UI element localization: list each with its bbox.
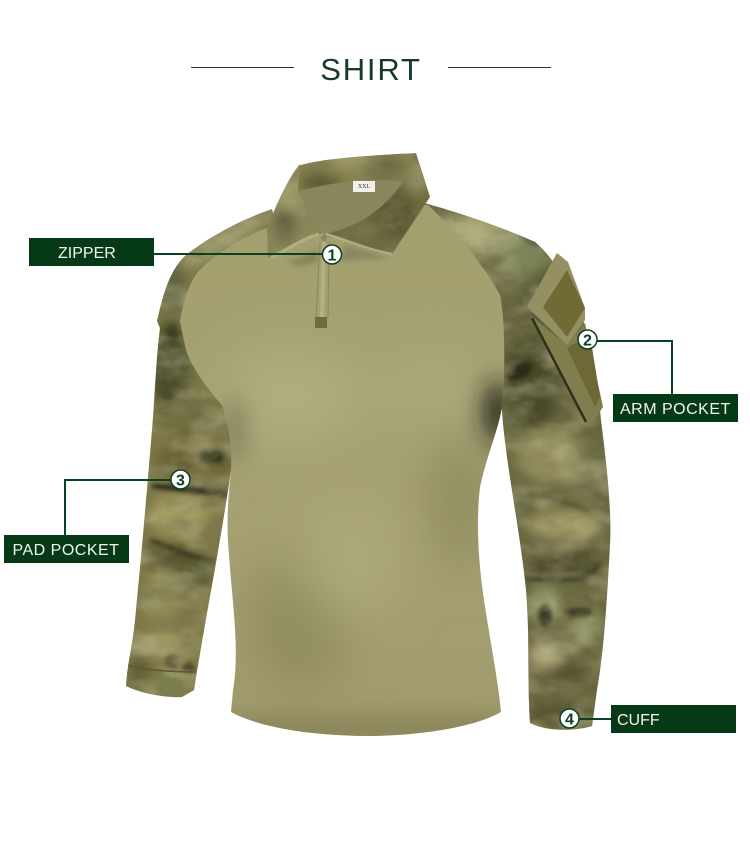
callout: zipper: 1: [328, 248, 337, 264]
collar and label: [262, 150, 435, 266]
callout: cuff: 4: [565, 712, 574, 728]
callout: cuff: CUFF: [617, 712, 660, 729]
callout: pad pocket: PAD POCKET: [12, 542, 119, 559]
shirt illustration: [120, 150, 620, 740]
size label: XXL: [358, 184, 370, 190]
title: SHIRT: SHIRT: [320, 52, 422, 87]
callout: arm pocket: ARM POCKET: [620, 401, 731, 418]
callout: zipper: [29, 238, 342, 266]
torso: [170, 195, 515, 740]
callout: arm pocket: [578, 330, 738, 422]
callout: cuff: [560, 705, 736, 733]
zipper placket and pull tab: [315, 235, 329, 328]
callout: zipper: ZIPPER: [58, 245, 116, 262]
right camouflage sleeve: [424, 203, 610, 730]
callout: pad pocket: 3: [176, 472, 185, 490]
left camouflage sleeve: [126, 209, 273, 698]
arm pocket with velcro patches: [527, 253, 603, 423]
callout: arm pocket: 2: [583, 332, 592, 350]
callout: pad pocket: [4, 470, 190, 563]
size label: [353, 181, 375, 192]
